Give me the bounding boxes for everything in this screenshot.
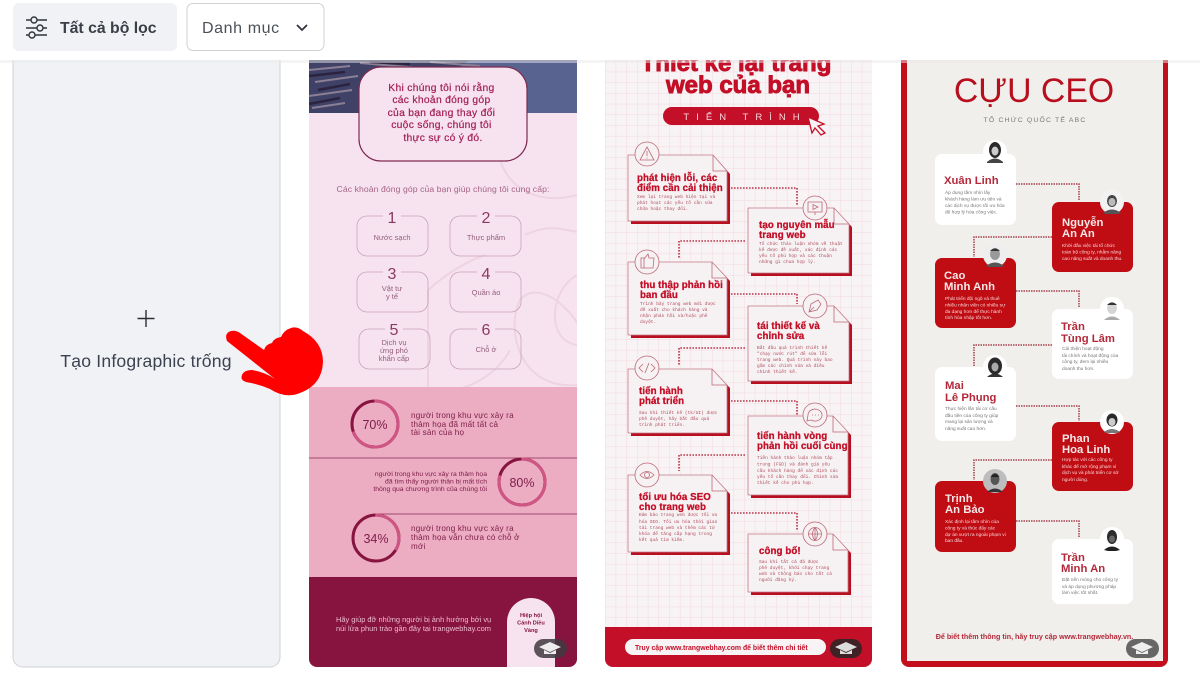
icon: plus <box>138 310 154 327</box>
person: Trần Minh An: Trần <box>1061 552 1085 564</box>
portrait <box>983 243 1007 267</box>
callout: headline box: thực sự có ý đó. <box>403 133 483 144</box>
person: Trịnh An Bảo: An Bảo <box>945 504 985 516</box>
person: Xuân Linh: Áp dụng tầm nhìn lấy <box>945 189 991 196</box>
step 4: trang web. Quá trình này bao <box>757 357 833 363</box>
badge: graduation cap <box>830 639 862 658</box>
subtitle: TỔ CHỨC QUỐC TẾ ABC <box>984 114 1086 124</box>
step 2: Tổ chức thảo luận nhóm về thuật <box>759 240 843 247</box>
step 1: điểm cần cải thiện <box>637 183 723 194</box>
step 5: phê duyệt, hãy bắt đầu quá <box>639 414 710 422</box>
person: Nguyễn An An: cao năng suất và doanh thu. <box>1062 256 1123 262</box>
step 7: kết quả tìm kiếm. <box>639 537 685 543</box>
step 2: yếu tố phù hợp và các thuận <box>759 253 832 259</box>
logo arch <box>507 598 555 667</box>
person: Nguyễn An An: An An <box>1062 228 1095 240</box>
icon: pen <box>803 294 827 318</box>
step 7: tải trang web và thêm các từ <box>639 525 715 531</box>
person: Mai Lê Phụng: Thực hiện lần tái cơ cấu <box>945 406 997 412</box>
person: Trần Minh An: và áp dụng phương pháp <box>1062 584 1116 590</box>
step 1: phát hoạt các yếu tố cần sửa <box>637 199 713 206</box>
icon: red pointing hand <box>226 327 323 395</box>
callout: headline box: các khoản đóng góp <box>392 95 490 106</box>
step 6: thiết kế cho phù hợp. <box>757 480 814 486</box>
logo arch: Hiệp hội <box>520 613 542 619</box>
step 3: đề xuất cho khách hàng và <box>640 307 708 313</box>
stat 34%: mới <box>411 542 425 551</box>
title: web của bạn <box>665 72 810 99</box>
step 6: cầu khách hàng để xác định các <box>757 467 838 474</box>
person: Trịnh An Bảo: Trịnh <box>945 493 973 505</box>
panel: blank infographic card <box>13 30 280 667</box>
step 7: cho trang web <box>639 502 706 513</box>
step 4 <box>748 294 852 384</box>
step 5: tiến hành <box>639 386 683 397</box>
dropdown: categories <box>187 4 324 50</box>
portrait <box>1100 297 1124 321</box>
stat 34% <box>353 515 520 561</box>
step 1: phát hiện lỗi, các <box>637 173 718 184</box>
step 4: gồm các chỉnh sửa và điều <box>757 362 825 369</box>
stat 70% <box>352 401 514 447</box>
person: Mai Lê Phụng <box>935 355 1016 441</box>
connectors <box>974 184 1079 538</box>
person: Trần Minh An <box>1052 527 1133 604</box>
person: Phan Hoa Linh: Hoa Linh <box>1062 444 1110 456</box>
item 5: khẩn cấp <box>379 354 409 363</box>
person: Cao Minh Anh <box>935 243 1016 328</box>
icon: code <box>635 356 659 380</box>
step 7: tối ưu hóa SEO <box>639 492 711 503</box>
portrait <box>1100 190 1124 214</box>
person: Mai Lê Phụng: đầu tiên của công ty giúp <box>945 412 999 419</box>
person: Xuân Linh: để hợp lý hóa công việc. <box>945 208 997 216</box>
step 5 <box>628 356 730 436</box>
step 6: yếu tố cần thay đổi. Chỉnh sửa <box>757 473 838 480</box>
step 8: người đăng ký. <box>759 577 797 583</box>
step 6: trung (FGD) và đánh giá yêu <box>757 462 830 468</box>
item 3: 3 <box>388 266 397 283</box>
decorative swirl <box>428 160 582 391</box>
person: Nguyễn An An: toàn bộ công ty, nhằm nâng <box>1062 248 1121 256</box>
icon: globe <box>803 522 827 546</box>
item 1 <box>357 210 428 256</box>
person: Nguyễn An An <box>1052 190 1133 272</box>
person: Trần Tùng Lâm: công ty, đem lại nhiều <box>1062 359 1109 365</box>
stat 80%: thông qua chương trình của chúng tôi <box>373 485 487 493</box>
item 6 <box>450 322 521 369</box>
item 2 <box>450 210 521 256</box>
step 6 <box>748 403 851 498</box>
footer band: Hãy giúp đỡ những người bị ảnh hưởng bởi vụ <box>336 615 491 624</box>
icon: eye <box>635 463 659 487</box>
footer text: Để biết thêm thông tin, hãy truy cập www.trangwebhay.vn. <box>936 633 1133 641</box>
person: Xuân Linh: các dịch vụ được tối ưu hóa <box>945 203 1005 209</box>
item 2: Thực phẩm <box>467 233 505 242</box>
stat 34%: thảm họa vẫn chưa có chỗ ở <box>411 533 520 542</box>
step 8: web và thông báo cho tất cả <box>759 571 832 577</box>
icon: chevron <box>297 25 307 30</box>
button: all filters: Tất cả bộ lọc <box>60 20 157 37</box>
person: Cao Minh Anh: tính hòa nhập tốt hơn. <box>945 315 992 321</box>
portrait <box>983 469 1007 493</box>
person: Phan Hoa Linh: khác để mở rộng phạm vi <box>1062 463 1116 470</box>
panel: former CEOs infographic <box>901 60 1168 667</box>
stat 70%: người trong khu vực xảy ra <box>411 411 514 420</box>
footer band <box>605 627 872 667</box>
person: Trần Tùng Lâm: Trần <box>1061 321 1085 333</box>
stat 70%: tài sản của họ <box>411 428 464 437</box>
person: Cao Minh Anh: đa dạng hơn để thực hành <box>945 308 1002 315</box>
footer band <box>309 577 577 667</box>
title: Thiết kế lại trang <box>641 50 831 77</box>
process pill: TIẾN TRÌNH <box>683 112 807 123</box>
step 2 <box>748 196 852 276</box>
stat 80%: 80% <box>509 476 535 490</box>
person: Phan Hoa Linh: Hợp tác với các công ty <box>1062 457 1113 463</box>
item 1: Nước sạch <box>373 233 411 242</box>
step 5: phát triển <box>639 396 684 407</box>
item 2: 2 <box>482 210 491 227</box>
item 6: Chỗ ở <box>476 345 496 354</box>
footer band: Truy cập www.trangwebhay.com để biết thêm chi tiết <box>635 644 808 652</box>
person: Nguyễn An An: Nguyễn <box>1062 216 1104 229</box>
item 4: Quần áo <box>472 288 500 297</box>
person: Trần Tùng Lâm: tài chính và hoạt động của <box>1062 352 1119 359</box>
item 5: Dịch vụ <box>381 338 407 347</box>
person: Mai Lê Phụng: mang lại sản lượng và <box>945 419 993 425</box>
item 3: Vật tư <box>382 284 402 293</box>
connectors <box>679 188 797 530</box>
stat 80%: đã tìm thấy người thân bị mất tích <box>385 476 487 486</box>
callout: headline box: Khi chúng tôi nói rằng <box>388 81 495 94</box>
icon: warning <box>635 142 659 166</box>
step 8: công bố! <box>759 546 801 557</box>
person: Xuân Linh: khách hàng làm ưu tiên và <box>945 196 1002 202</box>
step 3 <box>628 250 730 338</box>
stat 70%: thảm họa đã mất tất cả <box>411 420 498 429</box>
panel: donation infographic <box>309 60 582 667</box>
step 3: nhận phản hồi và/hoặc phê <box>640 313 708 319</box>
person: Trần Minh An: làm việc tốt nhất. <box>1062 590 1098 596</box>
badge: graduation cap <box>1126 639 1159 658</box>
step 8 <box>748 522 851 595</box>
logo arch: Vàng <box>524 628 538 634</box>
person: Cao Minh Anh: Phát triển đội ngũ và thuê <box>945 295 1000 302</box>
icon: chat <box>803 403 827 427</box>
step 2: những gì chưa hợp lý. <box>759 259 816 265</box>
step 5: trình phát triển. <box>639 421 685 428</box>
step 4: tái thiết kế và <box>757 321 820 332</box>
item 5: ứng phó <box>380 346 408 355</box>
step 7: hóa SEO. Tối ưu hóa thời gian <box>639 519 718 525</box>
step 1: chữa hoặc thay đổi. <box>637 205 688 212</box>
step 2: tạo nguyên mẫu <box>759 220 835 231</box>
item 1: 1 <box>388 210 397 227</box>
process pill <box>663 107 819 125</box>
person: Phan Hoa Linh <box>1052 410 1133 491</box>
step 4: "chạy nước rút" để sửa lỗi <box>757 350 828 357</box>
step 3: thu thập phản hồi <box>640 280 723 291</box>
step 1 <box>628 142 730 224</box>
photo band <box>309 60 577 113</box>
person: Mai Lê Phụng: Lê Phụng <box>945 392 997 404</box>
stat 80%: người trong khu vực xảy ra thảm họa <box>375 471 487 478</box>
step 7: Đảm bảo trang web được tối ưu <box>639 512 718 518</box>
person: Trần Tùng Lâm: Tùng Lâm <box>1061 333 1115 345</box>
person: Trần Minh An: Đặt nền móng cho công ty <box>1062 577 1119 583</box>
item 5 <box>359 322 430 369</box>
footer band: núi lửa phun trào gần đây tại trangwebhay.com <box>336 624 491 633</box>
callout: headline box: của bạn đang thay đổi <box>388 107 495 119</box>
person: Trịnh An Bảo: Xác định lại tầm nhìn của <box>945 518 999 525</box>
step 4: chỉnh sửa <box>757 331 805 342</box>
step 5: Sau khi thiết kế (tk/UI) được <box>639 410 718 416</box>
step 3: ban đầu <box>640 290 678 301</box>
panel: website redesign infographic <box>605 50 872 667</box>
step 6: phản hồi cuối cùng <box>757 441 848 452</box>
item 3: y tế <box>386 292 399 301</box>
badge: graduation cap <box>534 639 567 658</box>
step 4: chỉnh thiết kế. <box>757 368 798 375</box>
person: Trịnh An Bảo: dự án vượt ra ngoài phạm vi <box>945 532 1006 538</box>
button: all filters <box>13 3 177 51</box>
step 3: duyệt. <box>640 319 656 325</box>
step 1: Xem lại trang web hiện tại và <box>637 194 716 200</box>
icon: sliders <box>26 17 47 38</box>
step 6: Tiến hành thảo luận nhóm tập <box>757 455 833 461</box>
callout: headline box: cuộc sống, chúng tôi <box>391 119 492 131</box>
portrait <box>983 355 1007 379</box>
step 2: trang web <box>759 230 806 241</box>
label: blank infographic: Tạo Infographic trống <box>60 351 232 371</box>
person: Trịnh An Bảo: ban đầu. <box>945 538 964 544</box>
stats section <box>309 387 577 578</box>
item 4 <box>450 266 521 312</box>
person: Mai Lê Phụng: Mai <box>945 380 964 392</box>
person: Trần Tùng Lâm <box>1052 297 1133 379</box>
step 3: Trình bày trang web mới được <box>640 301 716 307</box>
person: Cao Minh Anh: Minh Anh <box>944 281 995 293</box>
dropdown: categories: Danh mục <box>202 20 280 37</box>
person: Phan Hoa Linh: Phan <box>1062 433 1090 445</box>
person: Mai Lê Phụng: năng suất cao hơn. <box>945 426 986 432</box>
stat 70%: 70% <box>362 418 388 432</box>
logo arch: Cánh Diều <box>517 620 545 626</box>
person: Nguyễn An An: Khởi đầu việc tái tổ chức <box>1062 242 1116 249</box>
person: Trịnh An Bảo <box>935 469 1016 552</box>
item 4: 4 <box>482 266 491 283</box>
stat 34%: 34% <box>363 532 389 546</box>
title: CỰU CEO <box>954 72 1114 110</box>
icon: thumbs up <box>635 250 659 274</box>
step 7 <box>628 463 730 555</box>
item 6: 6 <box>482 322 491 339</box>
top toolbar <box>0 0 1200 63</box>
person: Trịnh An Bảo: công ty và thúc đẩy các <box>945 524 996 532</box>
person: Xuân Linh: Xuân Linh <box>944 175 999 187</box>
step 2: kế được đề xuất, xác định các <box>759 247 838 253</box>
step 4: Bắt đầu quá trình thiết kế <box>757 343 828 351</box>
person: Phan Hoa Linh: dịch vụ và phát triển cơ sở <box>1062 469 1119 476</box>
step 8: phê duyệt, khởi chạy trang <box>759 564 830 571</box>
portrait <box>983 140 1007 164</box>
person: Trần Tùng Lâm: doanh thu hơn. <box>1062 366 1094 372</box>
portrait <box>1100 527 1124 551</box>
step 7: khóa để tăng cấp hạng trong <box>639 530 712 537</box>
icon: video <box>803 196 827 220</box>
stat 80% <box>373 459 545 505</box>
portrait <box>1100 410 1124 434</box>
person: Xuân Linh <box>935 140 1016 225</box>
item 3 <box>357 266 428 312</box>
subheading: Các khoản đóng góp của bạn giúp chúng tôi cung cấp: <box>337 184 549 194</box>
person: Cao Minh Anh: nhiều nhân viên có nhiều sự <box>945 302 1006 308</box>
person: Trần Minh An: Minh An <box>1061 563 1105 575</box>
step 8: Sau khi tất cả đã được <box>759 559 819 565</box>
callout: headline box <box>359 67 527 161</box>
item 5: 5 <box>390 322 399 339</box>
stat 34%: người trong khu vực xảy ra <box>411 524 514 533</box>
person: Cao Minh Anh: Cao <box>944 270 965 282</box>
person: Trần Tùng Lâm: Cải thiện hoạt động <box>1062 346 1104 352</box>
step 6: tiến hành vòng <box>757 431 827 442</box>
icon: cursor <box>808 117 825 135</box>
person: Phan Hoa Linh: người dùng. <box>1062 477 1088 483</box>
